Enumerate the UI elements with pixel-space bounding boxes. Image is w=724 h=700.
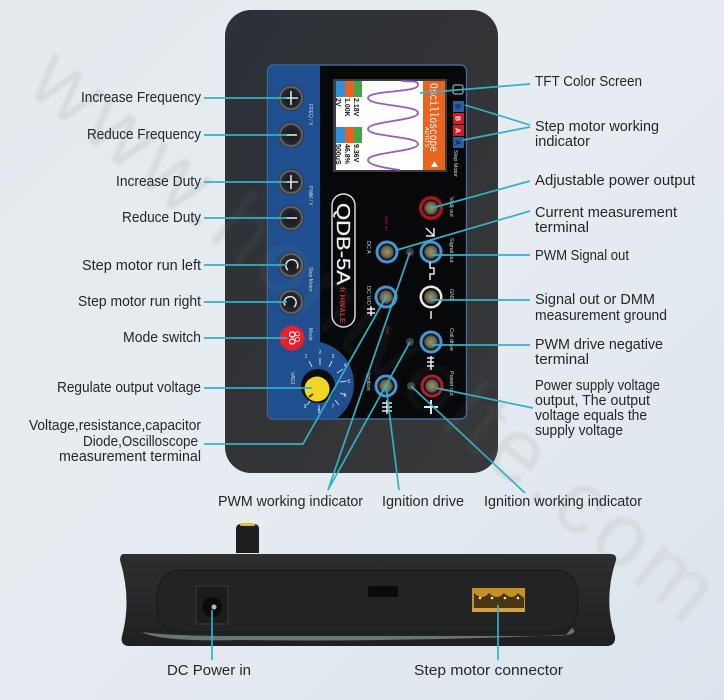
terminal labels: GND [448, 289, 454, 301]
screen readout values: 1.00K [343, 98, 350, 117]
button: mode [280, 326, 304, 350]
terminal labels: Ignition [365, 373, 371, 391]
step motor connector [472, 588, 525, 612]
knob scale: 1 [305, 354, 308, 360]
left labels: Mode switch [123, 330, 201, 346]
terminal: coil drive [420, 330, 442, 354]
bottom labels: DC Power in [167, 663, 251, 679]
step motor indicators: A [454, 140, 460, 145]
right labels: Adjustable power output [535, 173, 695, 189]
right labels: PWM drive negative [535, 337, 663, 353]
right labels: indicator [535, 134, 590, 150]
terminal: voltage out [419, 196, 443, 220]
knob scale [304, 350, 351, 415]
left labels: Increase Frequency [81, 90, 202, 106]
terminal: power out [420, 374, 444, 398]
right labels: PWM Signal out [535, 248, 629, 264]
side recess [157, 570, 578, 632]
terminal: ignition [374, 374, 398, 398]
right labels: terminal [535, 220, 589, 236]
bottom labels: Ignition working indicator [484, 494, 642, 510]
button: motor right [278, 289, 304, 315]
right labels: Current measurement [535, 205, 677, 221]
side knob [236, 523, 259, 553]
step motor indicators: B [454, 104, 460, 109]
side view of device [120, 523, 616, 646]
right labels: supply voltage [535, 423, 623, 439]
blue panel labels [289, 104, 313, 385]
left labels: Increase Duty [116, 174, 202, 190]
terminal labels: Coil drive [448, 328, 454, 351]
terminal labels [365, 197, 454, 396]
control panel [268, 65, 466, 419]
logo QDB-5A: fi HWALE [338, 287, 347, 323]
red current labels: Max [385, 326, 390, 335]
terminal: signal out [420, 240, 442, 264]
blue panel labels: VADJ [289, 372, 295, 385]
button: frequency plus [278, 85, 304, 111]
bottom labels: Step motor connector [414, 663, 563, 679]
terminal labels: Vadj out [448, 197, 454, 217]
terminal: DC V/O [374, 286, 398, 308]
terminal labels: Power out [448, 371, 454, 396]
screen title: Oscilloscope [426, 83, 440, 152]
side slot [368, 586, 398, 597]
left labels: Diode,Oscilloscope [83, 434, 198, 450]
left labels [29, 90, 202, 465]
right labels: voltage equals the [535, 408, 647, 424]
terminals [374, 196, 444, 398]
terminal: GND [420, 286, 442, 308]
blue panel labels: FREQ / X [307, 104, 313, 126]
watermark: www.hontvolte.com [11, 26, 724, 641]
device body [225, 10, 498, 473]
knob [301, 369, 335, 403]
knob scale: 6 [344, 393, 347, 399]
right labels: measurement ground [535, 308, 667, 324]
right labels: Signal out or DMM [535, 292, 655, 308]
left labels: measurement terminal [59, 449, 201, 465]
knob scale: 3 [332, 354, 335, 360]
left labels: Voltage,resistance,capacitor [29, 418, 201, 434]
left labels: Regulate output voltage [57, 380, 201, 396]
knob scale: 4 [344, 363, 347, 369]
watermark overlay on device: www.hontvolte.com [11, 26, 724, 641]
screen subtitle: AUTO S [423, 127, 429, 148]
terminal labels: Signal out [448, 238, 454, 263]
step motor indicators: B [454, 116, 460, 121]
red current labels [384, 216, 390, 335]
knob scale: 5 [348, 379, 351, 385]
screen readout values: 46.8% [343, 144, 350, 165]
right labels [535, 74, 695, 439]
screen arrow [431, 161, 438, 167]
right labels: TFT Color Screen [535, 74, 642, 90]
terminal: DC A [376, 240, 398, 264]
button: mode: OO [293, 331, 300, 342]
red current labels: Max 3A [384, 216, 389, 231]
bottom labels: PWM working indicator [218, 494, 363, 510]
step motor indicators [453, 101, 464, 148]
left labels: Reduce Frequency [87, 127, 202, 143]
knob scale: 8 [318, 409, 321, 415]
right labels: terminal [535, 352, 589, 368]
blue panel labels: Step Motor [307, 267, 313, 292]
leader lines [204, 84, 533, 660]
screen readout values [334, 98, 359, 165]
button: duty plus [278, 169, 304, 195]
screen readout values: 500uS [334, 144, 341, 165]
panel buttons [278, 85, 304, 350]
blue panel labels: Mode [307, 328, 313, 341]
left labels: Reduce Duty [122, 210, 202, 226]
right labels: Step motor working [535, 119, 659, 135]
waveform [368, 81, 418, 170]
terminal labels: DC V/O [365, 286, 371, 306]
terminal labels: DC A [365, 241, 371, 254]
left labels: Step motor run left [82, 258, 201, 274]
right labels: output, The output [535, 393, 650, 409]
knob scale: 2 [319, 350, 322, 356]
step motor indicators: A [454, 128, 460, 133]
button: mode: OO [287, 331, 297, 345]
indicator LEDs [406, 248, 415, 390]
icon: screen symbol [453, 85, 463, 94]
knob scale: 9 [304, 404, 307, 410]
button: duty minus [278, 205, 304, 231]
side highlight [142, 628, 574, 640]
bottom labels: Ignition drive [382, 494, 464, 510]
bottom labels [167, 494, 642, 679]
terminal symbols [367, 228, 438, 414]
side body [120, 554, 616, 646]
screen readout values: 2.18V [352, 98, 359, 117]
blue panel labels: PWM / Y [307, 186, 313, 206]
knob scale: 7 [332, 404, 335, 410]
left labels: Step motor run right [78, 294, 201, 310]
button: frequency minus [278, 122, 304, 148]
screen readout colour tags [336, 81, 362, 143]
logo QDB-5A: QDB-5A [333, 203, 353, 285]
right labels: Power supply voltage [535, 378, 660, 394]
logo QDB-5A [332, 194, 355, 327]
button: motor left [278, 252, 304, 278]
screen readout values: 2V [334, 98, 341, 107]
step motor label: Step Motor [452, 150, 458, 177]
screen readout values: 9.36V [352, 144, 359, 163]
DC jack [196, 586, 228, 624]
screen [333, 79, 447, 172]
